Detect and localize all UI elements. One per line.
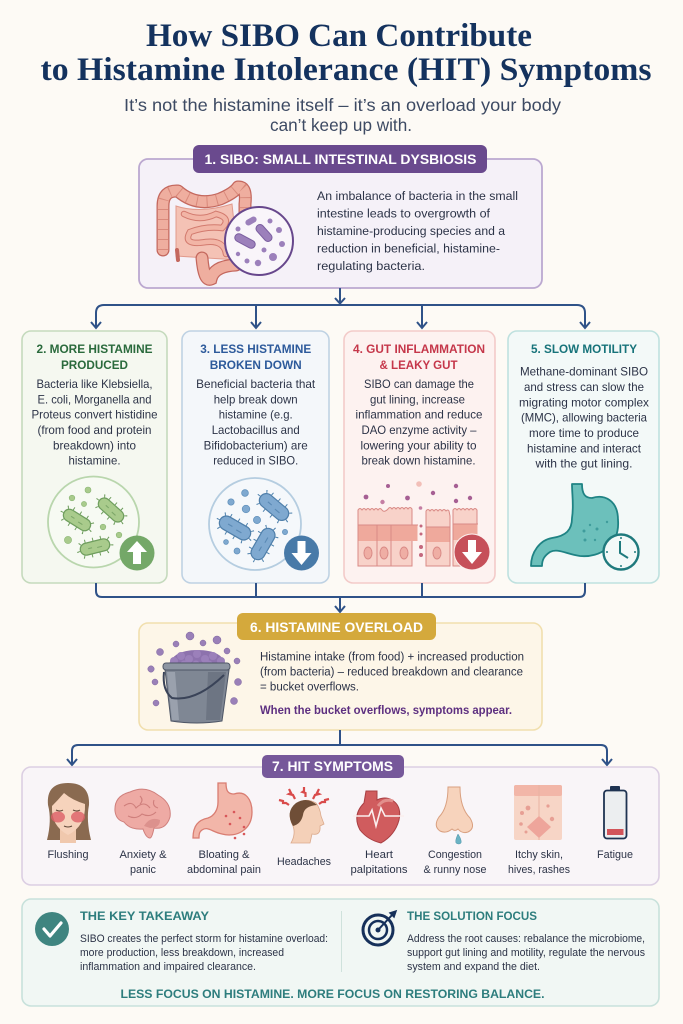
symptom: congestion and runny nose: Congestion xyxy=(428,849,482,861)
symptom: anxiety and panic xyxy=(115,789,170,876)
body text: lowering your ability to xyxy=(360,439,476,452)
text: solution focus: Address the root causes: rebalance the microbiome, xyxy=(407,933,645,945)
panel: 4 gut inflammation and leaky gut xyxy=(344,331,495,583)
symptom: itchy skin, hives, rashes xyxy=(508,785,570,876)
arrows: overload to symptoms xyxy=(67,730,612,765)
text: SIBO description: histamine-producing species and a xyxy=(317,224,505,238)
icon: up arrow badge xyxy=(120,536,154,570)
text: key takeaway: more production, less breakdown, increased xyxy=(80,947,284,959)
badge: 6 overload heading: 6. HISTAMINE OVERLOAD xyxy=(250,619,423,635)
icon: down arrow badge xyxy=(454,534,490,570)
symptom: bloating and abdominal pain xyxy=(187,783,261,876)
icon: check mark xyxy=(35,912,69,946)
text: key takeaway: SIBO creates the perfect storm for histamine overload: xyxy=(80,933,328,945)
text: key takeaway xyxy=(80,909,328,973)
heading xyxy=(200,342,311,372)
panel: 2 more histamine produced xyxy=(22,331,167,583)
symptom: headaches xyxy=(277,787,331,868)
panel: 5 slow motility xyxy=(508,331,659,583)
body text: reduced in SIBO. xyxy=(213,455,298,468)
subtitle xyxy=(124,95,561,135)
symptom: headaches: Headaches xyxy=(277,856,331,868)
text: SIBO description: reduction in beneficial, histamine- xyxy=(317,242,500,256)
body text: break down histamine. xyxy=(362,455,476,468)
body text: histamine and interact xyxy=(527,442,642,455)
body text: Bacteria like Klebsiella, xyxy=(36,378,152,391)
badge: 7 HIT symptoms heading: 7. HIT SYMPTOMS xyxy=(272,758,393,774)
body text: inflammation and reduce xyxy=(356,409,482,422)
icon: intestine with bacteria xyxy=(163,187,293,279)
heading: BROKEN DOWN xyxy=(210,358,302,372)
panel: 7 HIT symptoms xyxy=(22,755,659,885)
body text xyxy=(519,366,649,471)
symptom: fatigue xyxy=(597,786,633,861)
text: closing message: LESS FOCUS ON HISTAMINE. MORE FOCUS ON RESTORING BALANCE. xyxy=(120,987,544,1001)
title: to Histamine Intolerance (HIT) Symptoms xyxy=(40,52,652,88)
text: key takeaway: THE KEY TAKEAWAY xyxy=(80,909,210,923)
symptom: congestion and runny nose xyxy=(424,787,486,876)
symptom: itchy skin, hives, rashes: Itchy skin, xyxy=(515,849,563,861)
icon: overflowing bucket xyxy=(148,632,242,723)
body text: E. coli, Morganella and xyxy=(38,393,152,406)
text: solution focus: THE SOLUTION FOCUS xyxy=(407,909,537,923)
icon: blue bacteria circle xyxy=(209,478,301,570)
symptom: flushing xyxy=(47,783,91,861)
body text: gut lining, increase xyxy=(370,393,465,406)
body text: with the gut lining. xyxy=(534,458,632,471)
panel: 3 less histamine broken down xyxy=(182,331,329,583)
icon: target xyxy=(363,911,396,945)
arrows: mechanisms into overload xyxy=(96,583,585,612)
symptom: bloating and abdominal pain: abdominal pain xyxy=(187,864,261,876)
symptom: congestion and runny nose: & runny nose xyxy=(424,864,486,876)
text: SIBO description xyxy=(317,189,518,273)
text: key takeaway: inflammation and impaired clearance. xyxy=(80,961,256,973)
body text: and stress can slow the xyxy=(524,381,644,394)
symptom: bloating and abdominal pain: Bloating & xyxy=(198,849,250,861)
callout: bucket overflows: When the bucket overflows, symptoms appear. xyxy=(260,703,512,717)
body text: SIBO can damage the xyxy=(364,378,474,391)
body text: histamine (e.g. xyxy=(219,409,293,422)
heading: & LEAKY GUT xyxy=(380,358,458,372)
body text: Lactobacillus and xyxy=(212,424,300,437)
body text: DAO enzyme activity – xyxy=(362,424,477,437)
body text: histamine. xyxy=(68,455,120,468)
panel: takeaway and solution xyxy=(22,899,659,1006)
icon: leaky gut lining cells xyxy=(358,481,478,566)
heading: 3. LESS HISTAMINE xyxy=(200,342,311,356)
symptom: fatigue: Fatigue xyxy=(597,849,633,861)
body text: (from food and protein xyxy=(38,424,152,437)
text: solution focus xyxy=(407,909,645,973)
icon: stomach with clock xyxy=(531,484,638,570)
heading: 2. MORE HISTAMINE xyxy=(36,342,152,356)
symptom: heart palpitations xyxy=(350,791,408,876)
heading xyxy=(353,342,485,372)
text: SIBO description: intestine leads to overgrowth of xyxy=(317,206,491,220)
text: overload description xyxy=(260,650,524,694)
heading: PRODUCED xyxy=(61,358,128,372)
body text xyxy=(196,378,316,468)
text: overload description: Histamine intake (from food) + increased production xyxy=(260,650,524,664)
body text: breakdown) into xyxy=(53,439,136,452)
symptom: anxiety and panic: Anxiety & xyxy=(120,849,167,861)
subtitle: can’t keep up with. xyxy=(270,115,412,135)
panel: 1 SIBO xyxy=(139,145,542,288)
body text: (MMC), allowing bacteria xyxy=(521,412,648,425)
heading: 4. GUT INFLAMMATION xyxy=(353,342,485,356)
text: solution focus: system and expand the diet. xyxy=(407,961,540,973)
body text: migrating motor complex xyxy=(519,396,649,409)
body text: Proteus convert histidine xyxy=(32,409,158,422)
text: solution focus: support gut lining and motility, regulate the nervous xyxy=(407,947,645,959)
symptom: anxiety and panic: panic xyxy=(130,864,156,876)
panel: 6 histamine overload xyxy=(139,613,542,730)
symptom: heart palpitations: Heart xyxy=(365,849,393,861)
badge: 1 SIBO heading xyxy=(193,145,487,173)
title xyxy=(40,18,652,88)
symptom: heart palpitations: palpitations xyxy=(350,864,408,876)
body text: Beneficial bacteria that xyxy=(196,378,316,391)
badge: 6 overload heading xyxy=(237,613,436,640)
symptom: flushing: Flushing xyxy=(48,849,88,861)
body text: help break down xyxy=(214,393,298,406)
title: How SIBO Can Contribute xyxy=(146,18,532,54)
text: overload description: (from bacteria) – reduced breakdown and clearance xyxy=(260,665,523,679)
text: SIBO description: regulating bacteria. xyxy=(317,259,425,273)
body text: more time to produce xyxy=(529,427,639,440)
heading: 5. SLOW MOTILITY xyxy=(531,342,638,356)
text: SIBO description: An imbalance of bacteria in the small xyxy=(317,189,518,203)
arrows: SIBO to four mechanisms xyxy=(91,288,590,328)
body text xyxy=(356,378,482,468)
symptom: itchy skin, hives, rashes: hives, rashes xyxy=(508,864,570,876)
icon: green bacteria circle xyxy=(48,476,139,568)
icon: down arrow badge xyxy=(284,536,319,570)
heading xyxy=(36,342,152,372)
badge: 7 HIT symptoms heading xyxy=(262,755,404,778)
body text: Methane-dominant SIBO xyxy=(520,366,648,379)
badge: 1 SIBO heading: 1. SIBO: SMALL INTESTINAL DYSBIOSIS xyxy=(204,151,476,167)
body text xyxy=(32,378,158,468)
text: overload description: = bucket overflows. xyxy=(260,680,359,694)
subtitle: It’s not the histamine itself – it’s an overload your body xyxy=(124,95,561,115)
body text: Bifidobacterium) are xyxy=(204,439,308,452)
